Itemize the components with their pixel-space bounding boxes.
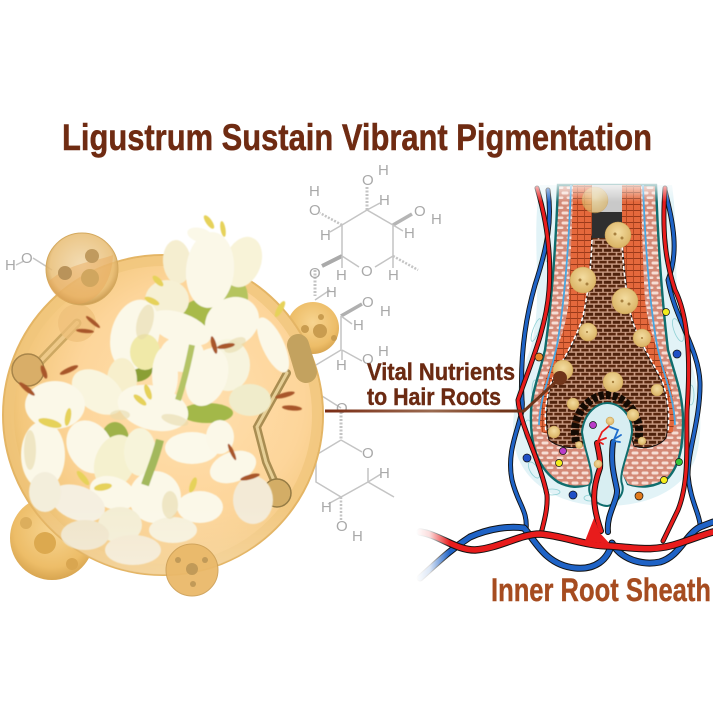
nutrient pores <box>578 232 643 383</box>
molecule atom labels: O <box>361 263 373 280</box>
golden molecule spheres behind <box>10 302 339 580</box>
follicle outer dermis <box>513 185 700 506</box>
molecule atom labels: O <box>309 202 321 219</box>
brown hair bulb with matrix cells <box>546 236 668 448</box>
cells <box>523 308 682 500</box>
dark hair shaft top <box>592 185 622 238</box>
bottom small golden sphere <box>166 544 218 596</box>
fade at top of follicle <box>525 170 690 202</box>
light upper hair shaft <box>592 185 622 212</box>
molecule atom labels: H <box>326 284 337 301</box>
glass molecule bonds inside sphere <box>30 323 306 492</box>
molecule atom labels: H <box>380 303 391 320</box>
molecule atom labels: O <box>362 172 374 189</box>
molecule atom labels: H <box>5 257 16 274</box>
pink outer root sheath with cells <box>531 185 683 487</box>
molecule atom labels: H <box>379 192 390 209</box>
callout: vital nutrients: to Hair Roots <box>367 384 501 411</box>
top-left small golden sphere <box>46 233 118 305</box>
molecule atom labels: O <box>362 445 374 462</box>
fade at left end of vessels <box>416 522 450 584</box>
callout: vital nutrients: Vital Nutrients <box>367 359 515 386</box>
stems <box>145 345 192 485</box>
molecule diagram: gray chemical structure <box>16 186 418 520</box>
molecule atom labels: H <box>352 528 363 545</box>
molecule atom labels: H <box>388 267 399 284</box>
callout: vital nutrients <box>367 359 515 411</box>
petal shading <box>24 303 248 519</box>
molecule atom labels: O <box>414 203 426 220</box>
molecule atom labels <box>5 162 442 545</box>
molecule atom labels: H <box>321 499 332 516</box>
molecule atom labels: H <box>309 183 320 200</box>
molecule atom labels: H <box>320 227 331 244</box>
main blood vessels <box>420 188 713 578</box>
molecule atom labels: O <box>336 400 348 417</box>
flower cluster: ligustrum blossoms <box>18 214 302 565</box>
molecule atom labels: H <box>404 225 415 242</box>
petals <box>21 225 296 565</box>
molecule atom labels: H <box>431 211 442 228</box>
anthers: yellow <box>37 214 287 494</box>
stems and leaves <box>101 276 248 458</box>
cyan inner sheath lines <box>539 185 675 425</box>
nutrient spheres <box>548 187 663 468</box>
lower fade over flowers <box>31 505 295 575</box>
molecule atom labels: H <box>378 162 389 179</box>
molecule atom labels: H <box>353 317 364 334</box>
molecule atom labels: O <box>309 265 321 282</box>
molecule atom labels: O <box>336 518 348 535</box>
molecule atom labels: H <box>336 267 347 284</box>
capillaries and central vessels <box>594 426 621 532</box>
pink lower bulb <box>541 432 673 486</box>
sphere rim highlight <box>9 261 317 569</box>
black matrix around papilla <box>575 395 639 442</box>
molecule atom labels: O <box>21 250 33 267</box>
molecule atom labels: O <box>362 294 374 311</box>
connector line from sphere to follicle <box>325 410 503 412</box>
glass balls on bonds <box>12 304 291 507</box>
molecule atom labels: H <box>379 465 390 482</box>
anthers: brown <box>18 315 302 482</box>
molecule atom labels: H <box>336 357 347 374</box>
hair follicle diagram <box>416 170 713 584</box>
connector lead to brown dot <box>500 371 567 411</box>
dashed follicle border <box>545 240 669 432</box>
molecule atom labels: O <box>362 351 374 368</box>
dermal papilla <box>582 403 632 506</box>
molecule atom labels: H <box>378 343 389 360</box>
orange inner root sheath <box>540 185 674 452</box>
large golden sphere <box>3 255 323 575</box>
dermis swirl details <box>524 238 694 501</box>
